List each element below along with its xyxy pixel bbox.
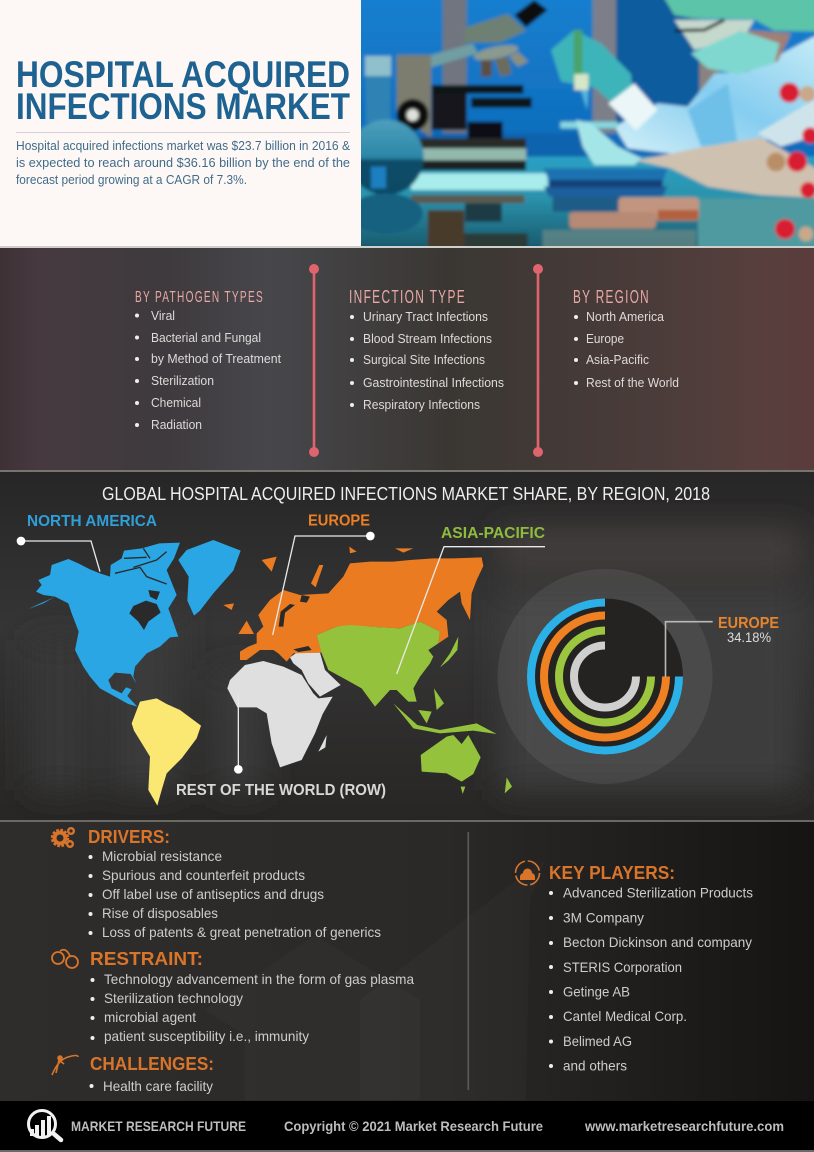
list: infection type: Gastrointestinal Infections (363, 376, 504, 390)
list: infection type: Surgical Site Infections (363, 353, 485, 367)
list: infection type: Urinary Tract Infections (363, 310, 488, 324)
title (16, 54, 350, 127)
list: by pathogen types: Radiation (151, 418, 202, 432)
world map (17, 532, 545, 806)
chart title: GLOBAL HOSPITAL ACQUIRED INFECTIONS MARKET SHARE, BY REGION, 2018 (102, 484, 710, 504)
list: by region: Asia-Pacific (586, 353, 649, 367)
chart callout: europe: EUROPE (718, 615, 779, 632)
panel: market dynamics (0, 820, 814, 1101)
section: key players: Becton Dickinson and company (563, 934, 752, 950)
intro text: Hospital acquired infections market was $23.7 billion in 2016 & (16, 139, 351, 153)
title: INFECTIONS MARKET (16, 86, 350, 127)
section: restraint: microbial agent (104, 1009, 196, 1025)
section: drivers: Loss of patents & great penetration of generics (102, 924, 381, 940)
section: drivers: DRIVERS: (88, 826, 170, 847)
chart callout: europe (718, 615, 779, 645)
intro text: is expected to reach around $36.16 billion by the end of the (16, 156, 350, 170)
icon: climber on slope (52, 1056, 78, 1075)
panel: title block (0, 0, 361, 246)
icon: group in target circle (516, 861, 540, 885)
list: by region: Rest of the World (586, 376, 679, 390)
region label: north america: NORTH AMERICA (27, 513, 157, 530)
list: by pathogen types: Viral (151, 309, 175, 323)
section: restraint: Sterilization technology (104, 990, 243, 1006)
map: africa and middle east (227, 653, 341, 767)
website: www.marketresearchfuture.com (584, 1118, 784, 1134)
section: drivers: Microbial resistance (102, 848, 222, 864)
radial bar chart (498, 569, 713, 784)
map: asia pacific (317, 622, 512, 794)
leader lines (21, 536, 545, 769)
list: by region (573, 287, 679, 390)
list: by region: BY REGION (573, 287, 650, 307)
list: by region: North America (586, 310, 664, 324)
divider: left (309, 264, 319, 457)
section: restraint: Technology advancement in the form of gas plasma (104, 971, 414, 987)
photo: scientist with microscope in a lab (348, 0, 814, 257)
section: key players (516, 861, 753, 1074)
section: restraint: patient susceptibility i.e., immunity (104, 1028, 309, 1044)
section: key players: KEY PLAYERS: (549, 862, 675, 883)
divider: right (533, 264, 543, 457)
chart callout: europe: 34.18% (727, 629, 771, 645)
list: by pathogen types (135, 289, 282, 432)
intro text: forecast period growing at a CAGR of 7.3%. (16, 173, 247, 187)
section: key players: and others (563, 1058, 627, 1074)
list: infection type: Blood Stream Infections (363, 332, 492, 346)
section: challenges: Health care facility (103, 1078, 213, 1094)
section: restraint (52, 948, 414, 1044)
section: key players: Cantel Medical Corp. (563, 1008, 687, 1024)
list: by region: Europe (586, 332, 624, 346)
region label: europe: EUROPE (308, 512, 370, 530)
region label: rest of the world: REST OF THE WORLD (ROW) (176, 782, 386, 799)
list: by pathogen types: Bacterial and Fungal (151, 331, 261, 345)
company name: MARKET RESEARCH FUTURE (71, 1118, 246, 1134)
section: restraint: RESTRAINT: (90, 948, 203, 969)
list: infection type (349, 287, 504, 412)
list: by pathogen types: by Method of Treatment (151, 352, 282, 366)
section: key players: Getinge AB (563, 984, 630, 1000)
list: infection type: INFECTION TYPE (349, 287, 466, 307)
list: by pathogen types: Sterilization (151, 374, 214, 388)
section: drivers: Off label use of antiseptics and drugs (102, 886, 324, 902)
map: hudson bay and arctic channels (115, 548, 167, 630)
icon: handcuffs (52, 950, 78, 968)
list: infection type: Respiratory Infections (363, 398, 480, 412)
footer (0, 1101, 814, 1152)
map: north america (28, 540, 241, 707)
list: by pathogen types: Chemical (151, 396, 201, 410)
map: baltic and black seas (279, 595, 312, 652)
intro text (16, 139, 351, 187)
title: HOSPITAL ACQUIRED (16, 54, 350, 95)
section: challenges (52, 1053, 214, 1094)
section: drivers: Spurious and counterfeit products (102, 867, 305, 883)
section: key players: STERIS Corporation (563, 959, 682, 975)
list: by pathogen types: BY PATHOGEN TYPES (135, 289, 264, 306)
icon: gears (52, 828, 74, 847)
region label: asia-pacific: ASIA-PACIFIC (441, 525, 545, 542)
panel: market share by region (0, 470, 814, 821)
section: key players: 3M Company (563, 910, 644, 926)
logo (28, 1110, 61, 1140)
map: europe and russia (223, 547, 483, 662)
panel: segmentation (0, 248, 814, 470)
section: key players: Belimed AG (563, 1033, 632, 1049)
map: south america (132, 698, 201, 806)
section: key players: Advanced Sterilization Products (563, 884, 753, 900)
section: drivers (52, 826, 381, 940)
copyright: Copyright © 2021 Market Research Future (284, 1118, 543, 1134)
section: drivers: Rise of disposables (102, 905, 218, 921)
section: challenges: CHALLENGES: (90, 1053, 214, 1074)
